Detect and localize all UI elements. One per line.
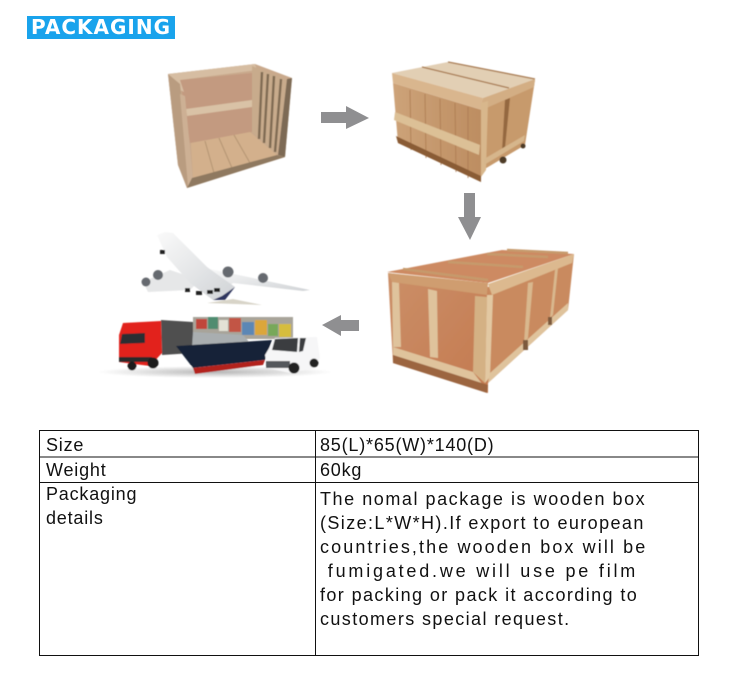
arrow: down [458, 193, 481, 240]
row: packaging details text: countries,the wooden box will be [320, 537, 647, 557]
arrow: left [322, 315, 359, 336]
row: size label: Size [46, 435, 84, 455]
row: weight label: Weight [46, 460, 106, 480]
crate lid [392, 62, 535, 98]
row: size value: 85(L)*65(W)*140(D) [320, 435, 494, 455]
row: packaging details label: Packaging details [46, 484, 137, 528]
long crate lid [387, 250, 574, 283]
illustration: packaging process [111, 60, 575, 394]
row: packaging details text: fumigated.we will use pe film [328, 561, 638, 581]
ground shadow [97, 366, 333, 378]
row: weight value: 60kg [320, 460, 362, 480]
row: packaging details text [320, 489, 647, 629]
arrow: right [321, 106, 369, 129]
transport vehicles [97, 232, 333, 378]
containers [193, 317, 293, 339]
open wooden crate [168, 64, 292, 188]
table grid [39, 430, 699, 656]
row: packaging details text: The nomal package is wooden box [320, 489, 646, 509]
long crate battens [392, 282, 401, 347]
specification table [39, 430, 699, 656]
row: packaging details text: customers special request. [320, 609, 570, 629]
crate straps [394, 112, 480, 155]
left post [168, 74, 191, 188]
row: packaging details text: (Size:L*W*H).If export to european [320, 513, 645, 533]
right slatted panel [252, 66, 287, 155]
ship [192, 332, 252, 347]
floor [191, 132, 277, 178]
closed wooden crate [392, 62, 535, 182]
long plywood crate [387, 250, 574, 393]
van [265, 337, 320, 373]
title: packaging: PACKAGING [31, 15, 171, 39]
airplane [142, 232, 310, 305]
truck [161, 320, 193, 355]
row: packaging details text: for packing or pack it according to [320, 585, 638, 605]
back panel [180, 73, 252, 143]
